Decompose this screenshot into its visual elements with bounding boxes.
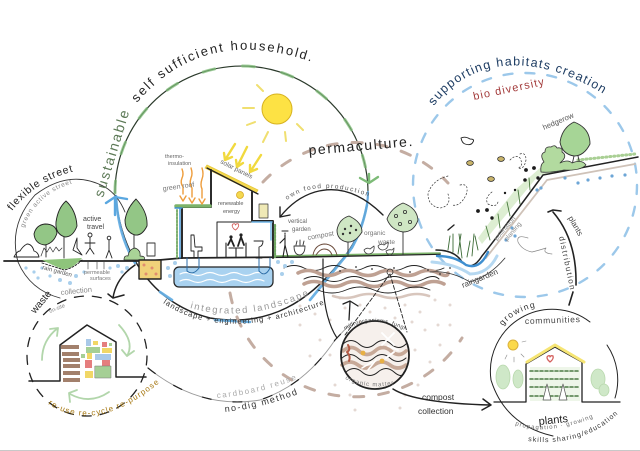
label: cardboard reuse: cardboard reuse	[217, 376, 296, 398]
planter pot	[294, 240, 305, 255]
title: self sufficient household: self sufficient household.	[133, 40, 310, 102]
people: active travel	[73, 233, 112, 258]
sun	[243, 85, 303, 142]
permeable surface arrows	[88, 262, 104, 269]
label: permeable surfaces: permeable	[84, 270, 110, 276]
label: vertical garden: garden	[292, 227, 311, 233]
label: microorganisms fungi: microorganisms, fungi	[344, 318, 406, 330]
label: organic waste: organic	[364, 230, 386, 237]
label: thermo-insulation: thermo-	[165, 154, 184, 160]
label: collection: collection	[60, 285, 92, 297]
house: waste sorting	[29, 325, 146, 382]
circle: integrated landscape arc	[116, 196, 367, 322]
label: pollination planting: planting	[503, 221, 523, 243]
label: propagation growing: propagation · growing	[515, 415, 593, 430]
growing communities circle	[490, 309, 620, 436]
label: active travel: travel	[87, 224, 105, 231]
label: pollination planting: pollination	[493, 215, 518, 242]
label: thermo-insulation: insulation	[168, 161, 191, 167]
circle: self-sufficient household	[115, 66, 368, 248]
arrow: organic matter rising	[343, 301, 358, 320]
label: plants: plants	[566, 214, 585, 237]
label: on-site: on-site	[49, 303, 66, 315]
dashes on no-dig arc	[148, 322, 352, 402]
label: compost collection: compost	[422, 392, 455, 402]
rain garden	[41, 247, 82, 270]
ground line	[4, 254, 440, 261]
tree: street right	[124, 199, 147, 260]
house	[175, 165, 275, 258]
arrow: plants distribution	[548, 210, 576, 285]
soil dots around underground	[298, 296, 452, 412]
title: flexible street: flexible street	[7, 165, 73, 210]
arrows: sun rays	[224, 144, 261, 172]
tree: flexible street tall	[56, 201, 77, 258]
label: raingarden: raingarden	[460, 267, 499, 290]
squiggle rainwater line	[518, 237, 552, 254]
arrows: thermo insulation	[180, 168, 205, 204]
arrow: own food production	[280, 190, 383, 217]
farmer	[280, 231, 288, 257]
title: supporting habitats creation: supporting habitats creation	[430, 56, 606, 105]
community trees	[496, 365, 609, 396]
icon: bin	[147, 243, 155, 256]
label: green active street: green active street	[21, 180, 72, 228]
water storage tank	[174, 258, 273, 287]
community sun	[505, 340, 526, 362]
label: hedgerow: hedgerow	[541, 110, 576, 132]
label: green roof: green roof	[162, 182, 195, 193]
label: own food production: own food production	[286, 183, 369, 200]
label: skills sharing education: skills sharing/education	[528, 412, 618, 442]
vertical root	[323, 259, 337, 338]
label: solar panels: solar panels	[219, 159, 254, 181]
label: renewable energy: energy	[223, 209, 240, 215]
label: communities: communities	[525, 314, 580, 326]
arrow: waste to street	[108, 265, 135, 298]
arrow: blue street	[106, 197, 127, 215]
circle: permaculture	[230, 143, 462, 397]
title: sustainable: sustainable	[91, 108, 132, 199]
label: vertical garden: vertical	[288, 219, 307, 225]
label: compost: compost	[307, 230, 334, 242]
chickens	[364, 242, 394, 255]
label: landscape engineering architecture: landscape + engineering + architecture	[164, 298, 324, 325]
circle: biodiversity	[413, 73, 637, 297]
dashed wiggly bee paths	[428, 154, 526, 208]
label: organic waste: waste	[377, 239, 395, 246]
water dots under street	[24, 260, 294, 285]
tree: flexible street small	[34, 224, 57, 257]
grass strip	[275, 253, 440, 256]
arrow: bottom of self-sufficient circle	[360, 174, 378, 183]
arc from waste to no-dig	[148, 322, 352, 402]
circle: flexible street	[15, 179, 125, 298]
label: no-dig method: no-dig method	[225, 388, 297, 412]
soakaway tank	[139, 260, 161, 279]
label: permeable surfaces: surfaces	[90, 276, 111, 282]
bottom edge line	[0, 450, 640, 451]
label: integrated landscape: integrated landscape	[190, 291, 308, 315]
label: compost collection: collection	[418, 406, 454, 416]
magnified soil circle	[341, 269, 409, 389]
arrows: recycling loop	[42, 325, 134, 402]
label: rain garden: rain garden	[41, 265, 72, 279]
biodiversity bank slope	[430, 154, 638, 282]
compost heap	[313, 244, 337, 255]
soil layers	[284, 266, 451, 298]
arrow: compost collection	[393, 389, 491, 410]
label: distribution: distribution	[557, 236, 577, 290]
label: growing: growing	[500, 303, 535, 326]
label: bio diversity: bio diversity	[472, 76, 546, 103]
icon: car	[14, 244, 39, 257]
greenhouse details	[527, 345, 584, 401]
label: re-use re-cycle re-purpose: re-use re-cycle re-purpose	[48, 380, 158, 416]
icon: bees	[448, 137, 504, 230]
label: renewable energy: renewable	[218, 201, 243, 207]
dashed waste circle	[27, 296, 147, 416]
label: active travel: active	[83, 216, 101, 223]
title: permaculture: permaculture.	[308, 133, 413, 158]
label: organic matter: organic matter	[346, 376, 393, 386]
trees: permaculture	[337, 203, 418, 255]
tree: hedgerow	[541, 122, 590, 172]
label: plants (community): plants	[538, 413, 569, 428]
label: waste: waste	[28, 289, 54, 317]
